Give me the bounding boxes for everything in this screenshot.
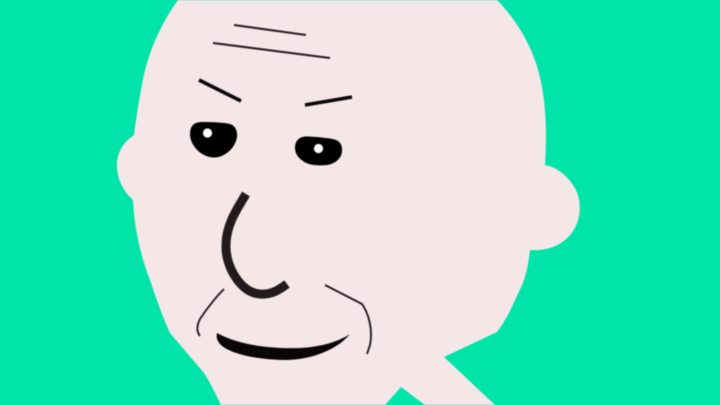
left eyebrow	[199, 80, 241, 101]
right eyebrow	[305, 97, 352, 105]
nose	[226, 194, 287, 294]
forehead wrinkles	[213, 25, 330, 58]
upper wrinkle	[234, 25, 306, 35]
head and neck silhouette	[117, 0, 580, 405]
left eye	[190, 122, 237, 158]
right eye	[295, 136, 342, 165]
right smile line	[325, 285, 371, 354]
right eye highlight	[314, 144, 323, 153]
mouth	[217, 333, 350, 360]
left eye highlight	[203, 128, 212, 138]
left smile line	[197, 289, 224, 336]
lower wrinkle	[213, 43, 330, 58]
